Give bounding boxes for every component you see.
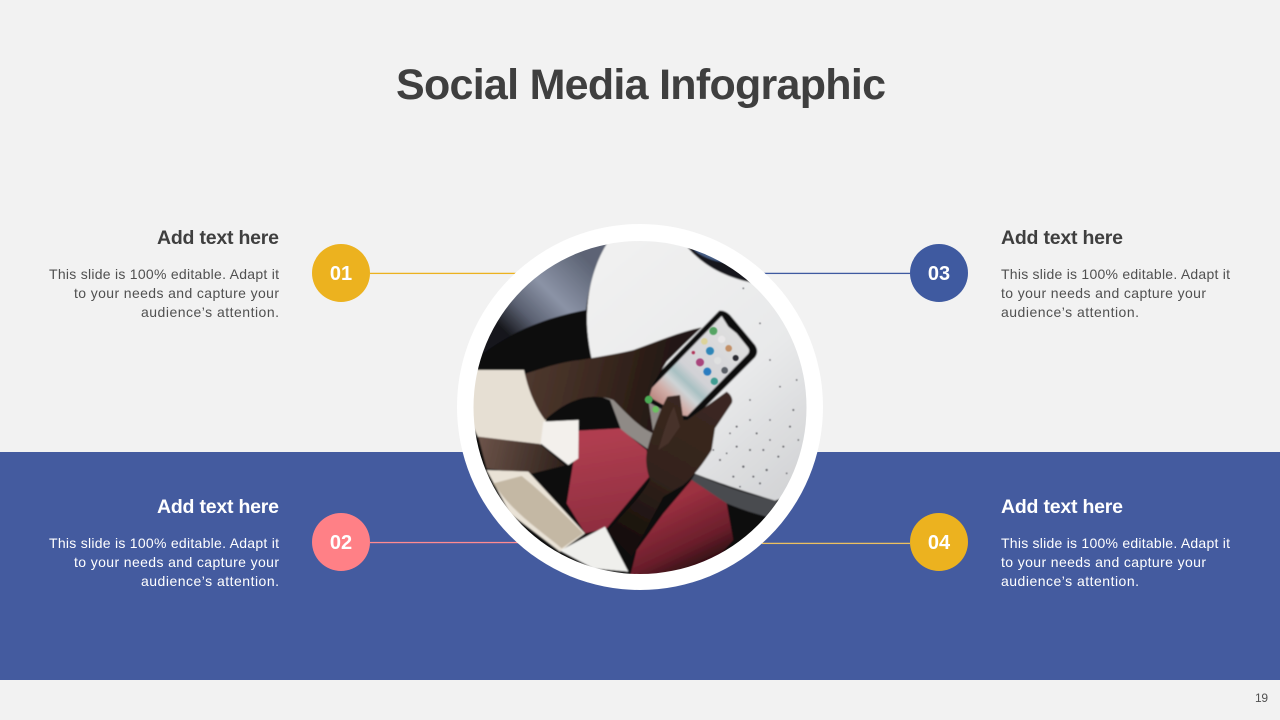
body text 03: to your needs and capture your — [1001, 285, 1206, 301]
badge 04 — [910, 513, 968, 571]
black gap below hand — [601, 396, 621, 430]
white cuff — [541, 420, 579, 465]
heading 03: Add text here — [1001, 227, 1123, 249]
red skirt right — [630, 480, 733, 577]
body text 04 — [1001, 535, 1230, 589]
red skirt left — [567, 428, 649, 533]
body text 04: audience’s attention. — [1001, 573, 1139, 589]
table speckles — [712, 287, 799, 487]
badge 01: 01 — [330, 263, 352, 285]
background band — [0, 452, 1280, 680]
body text 02: to your needs and capture your — [74, 554, 279, 570]
item 01 — [49, 227, 370, 320]
body text 02 — [49, 535, 279, 589]
badge 03 — [910, 244, 968, 302]
body text 03: This slide is 100% editable. Adapt it — [1001, 266, 1230, 282]
badge 03: 03 — [928, 263, 950, 285]
body text 01: This slide is 100% editable. Adapt it — [49, 266, 279, 282]
body text 02: This slide is 100% editable. Adapt it — [49, 535, 279, 551]
screen app icons — [709, 327, 717, 335]
page number: 19 — [1255, 691, 1268, 705]
body text 01: to your needs and capture your — [74, 285, 279, 301]
table edge strip — [601, 396, 662, 450]
white ring — [457, 224, 823, 590]
body text 04: to your needs and capture your — [1001, 554, 1206, 570]
item 03 — [910, 227, 1230, 320]
badge 01 — [312, 244, 370, 302]
dark plate — [687, 248, 751, 284]
table edge shadow — [688, 474, 778, 517]
badge 02 — [312, 513, 370, 571]
phone body — [640, 311, 757, 422]
table — [587, 240, 813, 501]
cuff two — [560, 527, 628, 572]
body text 02: audience’s attention. — [141, 573, 279, 589]
hand two — [607, 392, 732, 557]
title: Social Media Infographic — [396, 61, 886, 109]
item 04 — [910, 496, 1230, 589]
heading 04: Add text here — [1001, 496, 1123, 518]
body text 03 — [1001, 266, 1230, 320]
lower arm — [478, 437, 565, 474]
heading 01: Add text here — [157, 227, 279, 249]
item 02 — [49, 496, 370, 589]
badge 02: 02 — [330, 532, 352, 554]
phone screen — [647, 316, 749, 416]
body text 04: This slide is 100% editable. Adapt it — [1001, 535, 1230, 551]
body text 01 — [49, 266, 279, 320]
body text 01: audience’s attention. — [141, 304, 279, 320]
central photo with white ring — [457, 224, 823, 590]
body text 03: audience’s attention. — [1001, 304, 1139, 320]
chair — [487, 470, 585, 552]
badge 04: 04 — [928, 532, 951, 554]
cloth — [483, 244, 607, 354]
heading 02: Add text here — [157, 496, 279, 518]
hand one — [525, 327, 702, 433]
beige shirt — [470, 370, 546, 446]
connector lines — [370, 273, 910, 544]
photo: hands holding a phone — [470, 237, 813, 580]
